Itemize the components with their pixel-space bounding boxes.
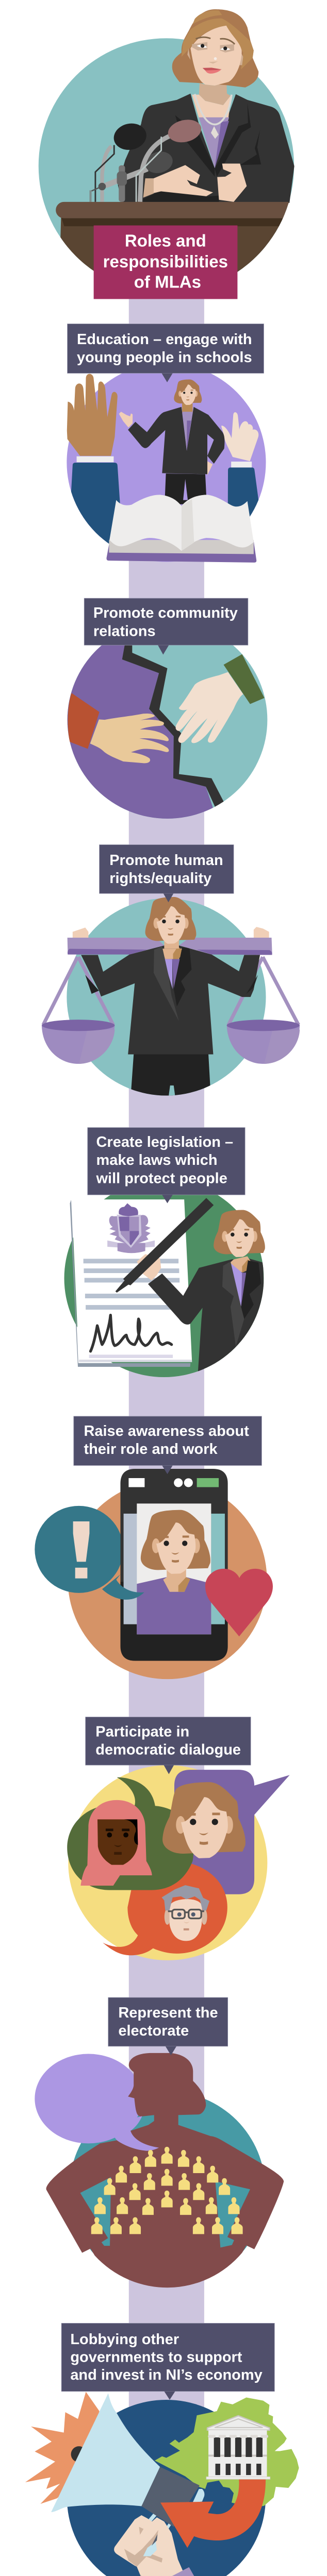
connecting column — [129, 294, 204, 2410]
neck and head — [145, 897, 196, 948]
speaker dot — [71, 2446, 87, 2462]
label: dialogue: democratic dialogue — [95, 1742, 241, 1758]
MLA figure — [119, 379, 224, 504]
label: human rights — [100, 845, 234, 902]
scale chains — [43, 957, 299, 1025]
label: lobbying: and invest in NI’s economy — [70, 2367, 263, 2383]
label: awareness — [74, 1416, 261, 1474]
split circle and crack — [67, 645, 267, 819]
pen — [116, 1198, 214, 1293]
bubble tail — [105, 2116, 159, 2151]
illustration: speaker — [118, 9, 295, 203]
crest — [107, 1204, 155, 1253]
label: education: young people in schools — [77, 349, 252, 366]
label: electorate: electorate — [118, 2023, 189, 2039]
orange speech bubble — [103, 1863, 227, 1955]
starburst — [25, 2392, 100, 2504]
label: legislation — [88, 1128, 245, 1204]
green circle — [64, 1179, 264, 1377]
green speech bubble — [67, 1777, 193, 1890]
silhouette — [46, 2053, 284, 2287]
title: responsibilities — [103, 252, 228, 272]
open book — [106, 495, 256, 563]
sleeve — [172, 2567, 194, 2576]
right pan — [227, 1020, 300, 1064]
MLA head — [162, 1782, 246, 1858]
panel: education — [67, 363, 266, 563]
fist — [114, 2515, 183, 2576]
title: Roles and — [125, 231, 206, 250]
panel: democratic dialogue — [67, 1765, 290, 1960]
label: electorate: Represent the — [118, 2005, 218, 2021]
right hand with green cuff — [176, 654, 265, 743]
teal gaps — [80, 2177, 250, 2247]
speech bubble — [35, 2054, 142, 2143]
signature — [89, 1315, 173, 1358]
label: lobbying: Lobbying other — [70, 2331, 179, 2348]
left hand with red cuff — [68, 693, 169, 763]
label: dialogue: Participate in — [95, 1724, 189, 1740]
panel: lobbying — [25, 2392, 299, 2576]
blue sleeves — [71, 463, 259, 544]
label: dialogue — [86, 1717, 251, 1774]
label: community: relations — [93, 623, 156, 639]
label: legislation: Create legislation – — [96, 1134, 233, 1150]
raised hand: right — [221, 412, 258, 467]
megaphone — [51, 2393, 204, 2529]
document — [70, 1199, 192, 1367]
bubble tail — [102, 1574, 144, 1600]
woman in headscarf — [80, 1800, 152, 1886]
beam shadow — [68, 949, 272, 955]
older man — [161, 1885, 209, 1941]
head — [214, 1210, 265, 1257]
heart — [205, 1569, 273, 1636]
panel: raise awareness — [35, 1469, 273, 1679]
microphones — [89, 116, 204, 202]
blue circle — [67, 2400, 266, 2576]
panel: community relations — [67, 645, 267, 819]
red arrow — [160, 2480, 266, 2548]
teal circle — [70, 2092, 265, 2287]
label: human rights: rights/equality — [109, 870, 211, 887]
scale beam — [68, 938, 272, 955]
label: electorate — [108, 1997, 228, 2055]
label: legislation: make laws which — [96, 1152, 218, 1168]
purple speech bubble — [174, 1770, 290, 1894]
title: of MLAs — [134, 273, 201, 292]
panel: represent the electorate — [35, 2053, 284, 2287]
label: awareness: their role and work — [84, 1441, 218, 1458]
body of MLA — [148, 1256, 264, 1371]
fists on beam — [73, 927, 269, 938]
yellow circle — [68, 1765, 267, 1960]
label: legislation: will protect people — [96, 1170, 227, 1187]
parliament building — [206, 2416, 270, 2479]
label: education: Education – engage with — [77, 331, 252, 348]
panel: MLA at podium — [39, 9, 308, 299]
panel: legislation — [64, 1195, 265, 1377]
teal circle — [67, 899, 266, 1096]
raised hand: left — [67, 374, 118, 462]
label: awareness: Raise awareness about — [84, 1423, 249, 1439]
title — [94, 226, 237, 299]
electorate icons — [91, 2147, 243, 2234]
label: lobbying — [61, 2323, 274, 2400]
speech bubble alert — [35, 1506, 123, 1593]
Northern Ireland map — [155, 2397, 299, 2508]
left pan — [42, 1020, 115, 1064]
podium — [56, 202, 289, 272]
panel: human rights — [42, 897, 300, 1099]
orange circle — [68, 1480, 267, 1679]
MLA figure as scale — [81, 945, 260, 1099]
smartphone — [120, 1469, 228, 1661]
label: lobbying: governments to support — [70, 2349, 242, 2365]
teal background circle — [39, 38, 294, 294]
label: human rights: Promote human — [109, 852, 223, 869]
hand — [137, 1254, 161, 1280]
label: education — [68, 324, 264, 382]
label: community: Promote community — [93, 605, 238, 621]
label: community — [84, 598, 248, 655]
purple background circle — [67, 363, 266, 562]
